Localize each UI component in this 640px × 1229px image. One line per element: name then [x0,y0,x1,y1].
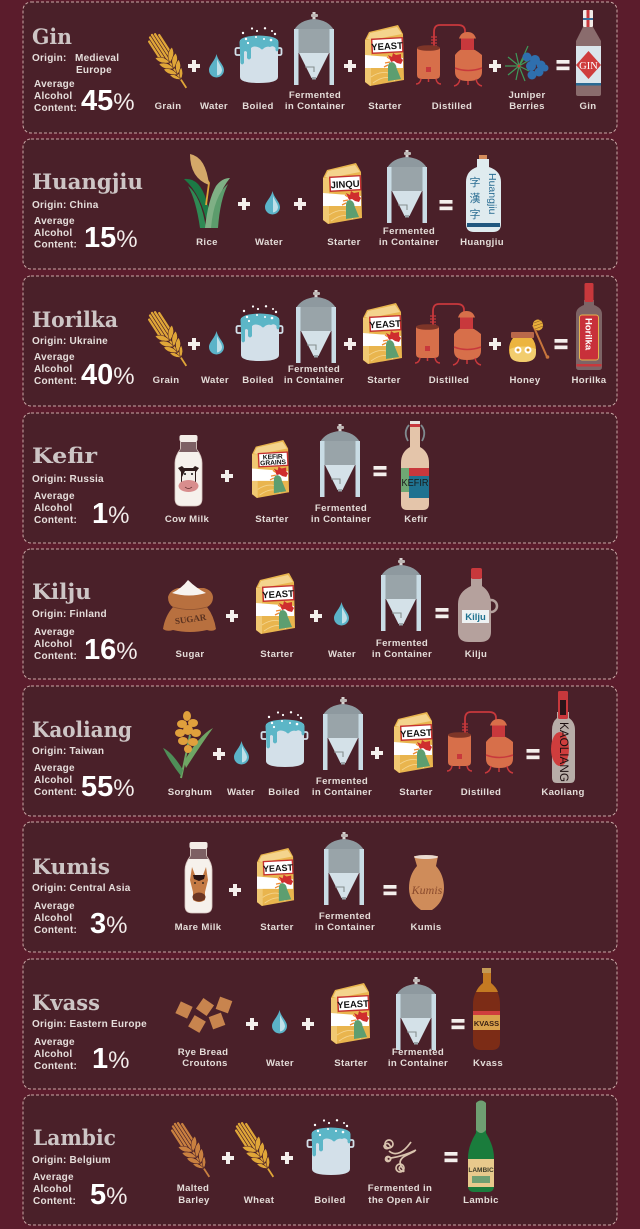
icon: kvass bottle [473,968,500,1050]
plus [371,747,383,759]
alcohol content label: Content: [34,925,77,936]
icon: yeast box [331,983,370,1044]
icon: fermentation tank [294,12,334,85]
heading: Kilju: Kilju [32,579,91,604]
icon: yeast box: YEAST [400,728,432,740]
origin: Origin: Belgium [32,1155,111,1166]
label: water: Water [200,101,228,112]
icon: yeast box: YEAST [262,589,294,601]
icon: lambic bottle [468,1100,494,1192]
label: horilka: Horilka [572,375,607,386]
alcohol content label: Average [34,763,75,774]
origin: Medieval [75,53,119,64]
icon: fermentation tank [387,150,427,223]
alcohol content label: Content: [34,787,77,798]
alcohol content label: Alcohol [33,1184,71,1195]
plus [281,1152,293,1164]
label: fermented: Fermented [392,1047,444,1058]
alcohol content label: Alcohol [34,639,72,650]
alcohol content label: Alcohol [34,91,72,102]
panel: Horilka [23,276,617,406]
icon: kefir bottle: KEFIR [402,478,428,489]
origin: Origin: Ukraine [32,336,108,347]
origin: Origin: Taiwan [32,746,104,757]
icon: huangjiu bottle: 字 [470,175,480,189]
label: fermented in the open air: the Open Air [368,1195,430,1206]
icon: still [416,25,482,86]
label: fermented: Fermented [376,638,428,649]
label: starter: Starter [368,101,402,112]
heading: Huangjiu: Huangjiu [32,169,143,194]
origin: Origin: [32,53,67,64]
panel: Gin [23,2,617,133]
alcohol content label: Average [34,491,75,502]
label: grain: Grain [153,375,179,386]
equals [436,608,448,618]
icon: fermentation tank [381,558,421,631]
panel: Kefir [23,413,617,543]
icon: fermentation tank [320,424,360,497]
label: starter: Starter [367,375,401,386]
label: juniper berries: Juniper [508,90,546,101]
label: fermented: in Container [285,101,345,112]
label: rice: Rice [196,237,218,248]
icon: water [334,602,349,626]
icon: fermentation tank [323,697,363,770]
panel: Kilju [23,549,617,679]
alcohol content label: Content: [34,651,77,662]
icon: honey [509,318,549,362]
origin: Origin: Eastern Europe [32,1019,147,1030]
icon: huangjiu bottle: 字 [470,207,480,221]
icon: kaoliang bottle: KAOLIANG [557,722,569,782]
icon: kilju jug [458,568,497,642]
icon: wheat [231,1119,282,1182]
icon: huangjiu bottle [466,155,501,232]
equals [526,749,540,759]
label: fermented: in Container [311,514,371,525]
icon: yeast box: YEAST [337,999,369,1011]
icon: still [447,712,513,773]
heading: Kaoliang: Kaoliang [32,717,132,742]
label: starter: Starter [255,514,289,525]
equals [384,885,396,895]
label: fermented: in Container [312,787,372,798]
plus [294,198,306,210]
plus [344,60,356,72]
label: boiled: Boiled [242,101,274,112]
label: fermented: Fermented [289,90,341,101]
icon: rye bread croutons [175,997,232,1033]
icon: water [272,1010,287,1034]
label: cow milk: Cow Milk [165,514,210,525]
label: gin: Gin [579,101,597,112]
label: boiled: Boiled [242,375,274,386]
label: fermented: in Container [284,375,344,386]
alcohol content label: Alcohol [34,775,72,786]
heading: Horilka: Horilka [32,307,118,332]
icon: juniper berries [505,46,548,81]
icon: huangjiu bottle: 漢 [470,192,480,205]
alcohol content label: Average [34,627,75,638]
label: fermented: Fermented [315,503,367,514]
origin: Origin: China [32,200,99,211]
icon: gin bottle [576,10,601,96]
icon: kefir bottle [401,421,429,510]
plus [221,470,233,482]
label: kumis: Kumis [410,922,442,933]
icon: fermentation tank [324,832,364,905]
icon: kumis jug [409,855,444,910]
percentage 1%: 1% [92,498,129,530]
label: water: Water [227,787,255,798]
icon: yeast box [363,303,402,364]
icon: still [415,304,481,365]
alcohol content label: Average [34,79,75,90]
plus [310,610,322,622]
icon: lambic bottle: LAMBIC [468,1167,494,1174]
icon: sorghum [163,711,213,778]
percentage 15%: 15% [84,222,138,254]
panel: Kvass [23,959,617,1089]
panel: Kaoliang [23,686,617,816]
heading: Gin: Gin [32,24,72,49]
label: rye bread croutons: Croutons [182,1058,228,1069]
label: sugar: Sugar [176,649,204,660]
label: fermented: Fermented [383,226,435,237]
label: water: Water [328,649,356,660]
plus [229,884,241,896]
heading: Lambic: Lambic [33,1125,116,1150]
alcohol content label: Average [33,1172,74,1183]
label: grain: Grain [155,101,181,112]
icon: kefir grains box [252,440,289,498]
plus [302,1018,314,1030]
label: huangjiu: Huangjiu [460,237,504,248]
label: juniper berries: Berries [509,101,545,112]
icon: boiled pot [236,305,282,361]
plus [188,338,200,350]
equals [444,1152,458,1162]
icon: water [234,741,249,764]
icon: yeast box: YEAST [263,862,294,874]
panel: Huangjiu [23,139,617,269]
heading: Kefir: Kefir [32,443,98,468]
alcohol content label: Content: [34,515,77,526]
heading: Kumis: Kumis [32,854,110,879]
label: malted barley: Malted [177,1183,209,1194]
equals [452,1019,464,1029]
label: boiled: Boiled [268,787,300,798]
icon: grain [144,30,195,93]
icon: fermentation tank [296,290,336,363]
alcohol content label: Content: [34,1061,77,1072]
origin: Origin: Finland [32,609,107,620]
icon: kvass bottle: KVASS [474,1019,499,1028]
icon: horilka bottle [576,283,602,370]
alcohol content label: Content: [34,103,77,114]
icon: kumis jug: Kumis [411,883,443,897]
plus [213,748,225,760]
label: water: Water [201,375,229,386]
icon: boiled pot [308,1119,354,1175]
origin: Europe [76,65,112,76]
icon: water [265,191,280,214]
icon: fermentation tank [396,977,436,1050]
icon: mare milk bottle [185,842,212,913]
origin: Origin: Russia [32,474,104,485]
icon: huangjiu bottle: Huangjiu [486,173,498,215]
equals [554,339,568,349]
alcohol content label: Alcohol [34,913,72,924]
alcohol content label: Content: [34,376,77,387]
icon: kefir grains box: GRAINS [260,459,287,467]
alcohol content label: Average [34,216,75,227]
icon: open air swirls [384,1140,416,1172]
icon: yeast box: YEAST [369,319,401,331]
label: mare milk: Mare Milk [175,922,222,933]
label: kaoliang: Kaoliang [541,787,585,798]
alcohol content label: Average [34,1037,75,1048]
alcohol content label: Content: [34,240,77,250]
icon: yeast box [394,712,433,773]
label: fermented: Fermented [319,911,371,922]
label: boiled: Boiled [314,1195,346,1206]
icon: kilju jug: Kilju [465,612,486,623]
heading: Kvass: Kvass [32,990,100,1015]
icon: sugar sack: SUGAR [174,612,207,626]
label: fermented: in Container [372,649,432,660]
alcohol content label: Alcohol [34,228,72,239]
label: starter: Starter [399,787,433,798]
label: distilled: Distilled [432,101,472,112]
origin: Origin: Central Asia [32,883,131,894]
label: fermented: in Container [315,922,375,933]
equals [440,200,452,210]
icon: kefir grains box: KEFIR [263,453,283,462]
label: kefir: Kefir [404,514,428,525]
icon: boiled pot [262,711,308,767]
label: distilled: Distilled [461,787,501,798]
plus [344,338,356,350]
percentage 55%: 55% [81,771,135,803]
label: starter: Starter [327,237,361,248]
alcohol content label: Alcohol [34,503,72,514]
plus [246,1018,258,1030]
percentage 16%: 16% [84,634,138,666]
label: wheat: Wheat [244,1195,275,1206]
icon: yeast box: YEAST [371,41,403,53]
alcohol content label: Content: [33,1196,76,1207]
plus [226,610,238,622]
icon: jinqu box: JINQU [330,179,360,191]
icon: rice [184,154,230,228]
label: fermented: in Container [388,1058,448,1069]
alcohol content label: Average [34,352,75,363]
icon: boiled pot [236,27,282,83]
label: water: Water [266,1058,294,1069]
label: malted barley: Barley [178,1195,210,1206]
alcohol content label: Alcohol [34,1049,72,1060]
icon: malted barley [167,1119,218,1182]
icon: jinqu box [323,163,362,224]
label: starter: Starter [260,649,294,660]
percentage 1%: 1% [92,1043,129,1075]
label: fermented in the open air: Fermented in [368,1183,432,1194]
equals [556,60,570,70]
percentage 40%: 40% [81,359,135,391]
icon: kaoliang bottle [551,691,575,783]
icon: grain [144,308,195,371]
icon: horilka bottle: Horilka [582,318,594,351]
plus [188,60,200,72]
percentage 45%: 45% [81,85,135,117]
panel: Kumis [23,822,617,952]
icon: yeast box [257,848,294,906]
label: fermented: Fermented [288,364,340,375]
label: fermented: in Container [379,237,439,248]
plus [238,198,250,210]
icon: yeast box [365,25,404,86]
icon: cow milk bottle [175,435,202,506]
label: sorghum: Sorghum [168,787,212,798]
icon: sugar sack [163,580,216,632]
label: water: Water [255,237,283,248]
label: fermented: Fermented [316,776,368,787]
icon: yeast box [256,573,295,634]
alcohol content label: Average [34,901,75,912]
alcohol content label: Alcohol [34,364,72,375]
icon: gin bottle: GIN [579,61,598,72]
label: distilled: Distilled [429,375,469,386]
panel: Lambic [23,1095,617,1225]
label: starter: Starter [334,1058,368,1069]
icon: water [209,331,224,354]
label: kvass: Kvass [473,1058,503,1069]
label: honey: Honey [509,375,541,386]
label: kilju: Kilju [465,649,487,660]
percentage 5%: 5% [90,1179,127,1211]
icon: water [209,54,224,78]
label: rye bread croutons: Rye Bread [178,1047,228,1058]
plus [489,60,501,72]
label: starter: Starter [260,922,294,933]
plus [489,338,501,350]
label: lambic: Lambic [463,1195,499,1206]
equals [374,466,386,476]
plus [222,1152,234,1164]
percentage 3%: 3% [90,908,127,940]
